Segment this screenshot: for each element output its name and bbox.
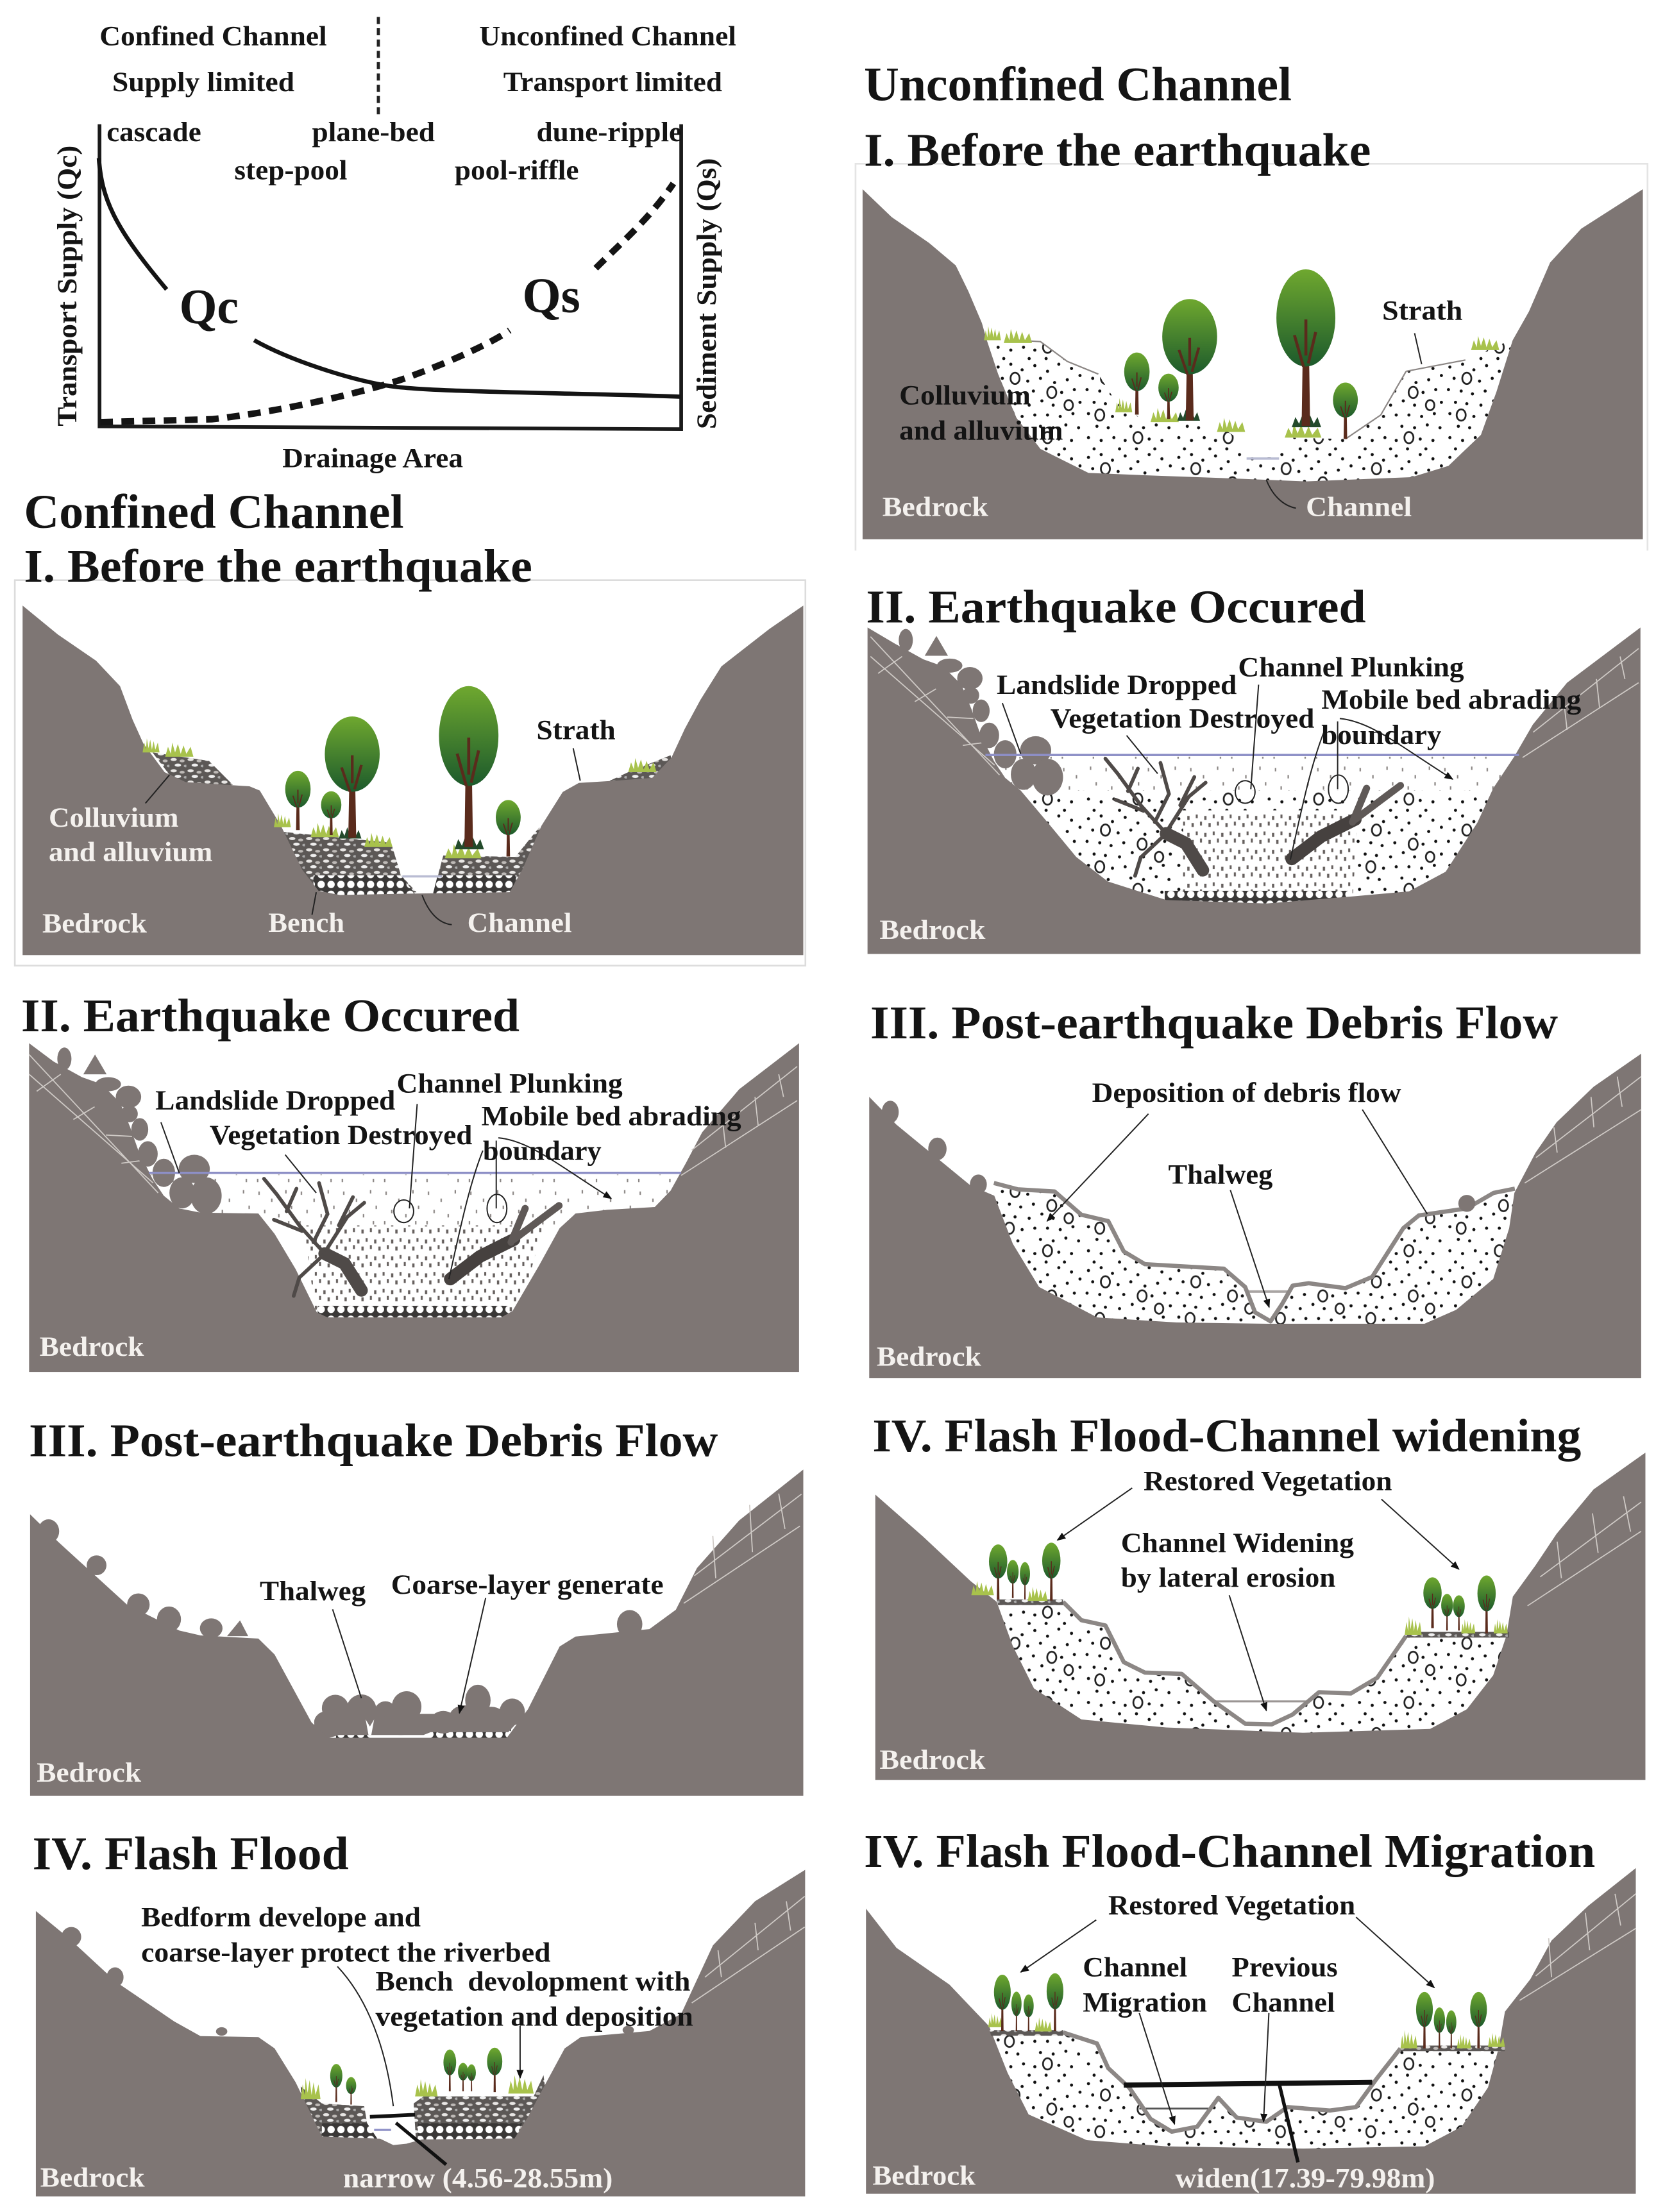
restored vegetation [988,1973,1505,2048]
destroyed tree [264,1179,364,1296]
terrace cobbles [997,1600,1509,1637]
label: bedrock: Bedrock [883,493,988,523]
label: and alluvium: and alluvium [899,416,1063,446]
label: channel: Channel [468,908,572,938]
label: vegetation destroyed: Vegetation Destroyed [1051,704,1314,734]
pebble row at bed [314,875,517,898]
panel: unconfined channel earthquake occurred [866,581,1641,954]
divider: confined versus unconfined [378,17,379,115]
pebble row at bed [322,2123,522,2140]
leader lines [1002,685,1453,860]
panel: confined channel debris flow [29,1414,803,1796]
sediment fill [988,1601,1514,1750]
label: cascade: cascade [106,117,201,148]
label: narrow width: narrow (4.56-28.55m) [343,2164,613,2194]
debris flow surface [994,1183,1515,1321]
label: restored vegetation: Restored Vegetation [1108,1891,1355,1921]
heading: II. Earthquake Occured [866,581,1366,633]
label: bench development with: Bench devolopment with [376,1967,691,1997]
dense sediment fill [303,1226,543,1327]
label: strath: Strath [1382,296,1463,326]
slope fractures [1528,1496,1641,1606]
landslide rocks [57,1047,222,1214]
heading: before the earthquake: I. Before the earthquake [864,124,1371,176]
destroyed tree [1106,759,1206,876]
vegetation [142,686,657,858]
label: channel plunking: Channel Plunking [1238,652,1464,682]
sediment fill [1017,791,1500,918]
label: channel plunking: Channel Plunking [397,1069,623,1099]
bedrock [868,627,1641,954]
label: coarse-layer generate: Coarse-layer generate [391,1570,664,1600]
label: previous: Previous [1232,1953,1338,1983]
bedrock [30,1469,803,1796]
broken log [450,1206,559,1279]
leader lines [337,1966,520,2106]
restored vegetation [301,2048,534,2104]
slope fractures [870,637,1639,775]
bedrock [866,1868,1636,2194]
label: pool-riffle: pool-riffle [455,156,579,186]
landslide rocks [899,629,1063,795]
heading: IV. Flash Flood [33,1827,349,1879]
pebble row at bed [317,1306,508,1320]
heading: III. Post-earthquake Debris Flow [870,997,1559,1049]
label: bedrock: Bedrock [40,1332,144,1362]
fine sediment fill [148,1174,685,1228]
panel: confined channel flash flood [33,1827,805,2197]
water surface [1139,2107,1208,2109]
water surface [1245,1290,1289,1293]
panel frame [15,580,806,966]
panel: unconfined channel before the earthquake [856,58,1648,550]
label: bedrock: Bedrock [877,1342,981,1372]
heading: unconfined channel: Unconfined Channel [479,21,736,51]
dense sediment fill [1183,810,1358,904]
restored vegetation [971,1542,1508,1635]
label: vegetation and deposition: vegetation and deposition [376,2002,693,2032]
label: colluvium: Colluvium [899,381,1031,411]
water level [985,754,1519,756]
label: boundary: boundary [483,1136,602,1166]
terrace cobbles [990,2030,1505,2051]
x axis label: drainage area: Drainage Area [282,444,463,474]
panel: confined channel earthquake occurred [21,990,799,1372]
label: bedrock: Bedrock [37,1758,141,1788]
broken log [1292,786,1401,859]
label: Qc: Qc [180,279,239,334]
strath surface lines [1017,340,1466,439]
label: deposition of debris flow: Deposition of debris flow [1092,1078,1401,1108]
panel: unconfined channel widening [872,1410,1645,1780]
leader arrows [1020,1917,1434,2124]
heading: confined channel: Confined Channel [99,21,327,51]
vegetation [984,269,1500,439]
label: bedrock: Bedrock [40,2163,145,2193]
label: migration: Migration [1083,1988,1207,2018]
heading: confined channel: Confined Channel [24,485,404,539]
label: thalweg: Thalweg [260,1576,366,1607]
pebble row at bed [1165,891,1348,904]
heading: before the earthquake: I. Before the earthquake [24,540,532,592]
leader lines [1047,1110,1427,1307]
coarse layer strip [336,1728,511,1741]
fallen rocks [882,1101,1475,1212]
label: bench: Bench [268,908,344,938]
heading: unconfined channel: Unconfined Channel [864,58,1292,111]
curve: Qc [99,158,680,397]
chart axes [99,124,681,429]
panel frame [856,164,1648,550]
label: Qs: Qs [522,267,580,323]
panel: unconfined channel debris flow [869,997,1641,1378]
label: channel: Channel [1083,1953,1187,1983]
deposits: colluvium terraces and benches [153,752,678,904]
label: bedrock: Bedrock [879,915,986,945]
label: restored vegetation: Restored Vegetation [1144,1466,1392,1496]
label: by lateral erosion: by lateral erosion [1121,1563,1335,1593]
label: channel widening: Channel Widening [1121,1528,1355,1558]
slope fractures [692,1896,805,2003]
label: mobile bed abrading: Mobile bed abrading [1321,685,1582,715]
sediment fill [994,1183,1515,1341]
panel: unconfined channel migration [864,1825,1636,2194]
width leader [396,2123,446,2165]
label: channel: Channel [1232,1988,1335,2018]
bedrock [22,605,803,955]
slope fractures [684,1494,802,1603]
deposits: benches [301,2075,553,2153]
fallen rocks [38,1519,643,1638]
leader lines [161,1104,611,1279]
label: bedrock: Bedrock [879,1745,986,1775]
bedrock [875,1453,1645,1780]
y axis label: sediment supply: Sediment Supply (Qs) [692,158,722,429]
bedrock [29,1043,799,1372]
sediment fill [984,337,1514,508]
label: and alluvium: and alluvium [49,838,213,868]
water level [149,1172,681,1174]
curve: Qs [100,183,673,422]
label: colluvium: Colluvium [49,803,179,833]
y axis label: transport supply: Transport Supply (Qc) [53,146,83,426]
water surface [1247,457,1279,460]
white gap [366,1719,374,1735]
width bar [1124,2082,1373,2085]
width leader [1280,2085,1298,2163]
label: channel: Channel [1306,493,1412,523]
label: coarse-layer protect the riverbed: coarse-layer protect the riverbed [141,1938,551,1968]
label: vegetation destroyed: Vegetation Destroyed [210,1120,472,1151]
slope fractures [1519,1894,1636,2000]
panel: confined channel before the earthquake [15,485,806,966]
label: bedrock: Bedrock [42,909,147,939]
text: supply limited: Supply limited [112,67,294,97]
text: transport limited: Transport limited [503,67,722,97]
label: boundary: boundary [1321,720,1442,750]
heading: II. Earthquake Occured [21,990,520,1042]
heading: IV. Flash Flood-Channel Migration [864,1825,1595,1877]
label: bedform develope and: Bedform develope and [141,1902,421,1932]
bedrock [863,189,1643,539]
bedrock [869,1054,1641,1378]
heading: IV. Flash Flood-Channel widening [872,1410,1581,1462]
leader lines [146,748,580,925]
boulders in channel [314,1685,525,1739]
label: dune-ripple: dune-ripple [536,117,682,148]
bedrock [36,1870,805,2197]
slope fractures [29,1054,797,1193]
flood surface [1063,1602,1406,1725]
label: thalweg: Thalweg [1168,1160,1273,1190]
fallen rocks [62,1927,634,2036]
water surface [402,875,442,877]
panel: supply and transport chart [53,17,736,474]
label: plane-bed: plane-bed [312,117,435,148]
leader lines [1266,333,1422,508]
heading: III. Post-earthquake Debris Flow [29,1414,718,1466]
label: bedrock: Bedrock [872,2161,976,2191]
label: mobile bed abrading: Mobile bed abrading [482,1101,741,1131]
label: strath: Strath [536,715,616,745]
water surface [1215,1700,1306,1702]
slope fractures [1525,1077,1641,1183]
leader arrows [1058,1488,1459,1710]
label: step-pool: step-pool [234,156,348,186]
label: widen width: widen(17.39-79.98m) [1175,2164,1435,2194]
leader lines [333,1598,486,1713]
water surface [374,2129,391,2131]
flood surface [1063,2032,1401,2132]
label: landslide dropped: Landslide Dropped [997,670,1237,700]
sediment fill [981,2031,1508,2167]
label: landslide dropped: Landslide Dropped [155,1086,395,1116]
width bar [370,2115,415,2117]
fine sediment fill [981,757,1522,793]
